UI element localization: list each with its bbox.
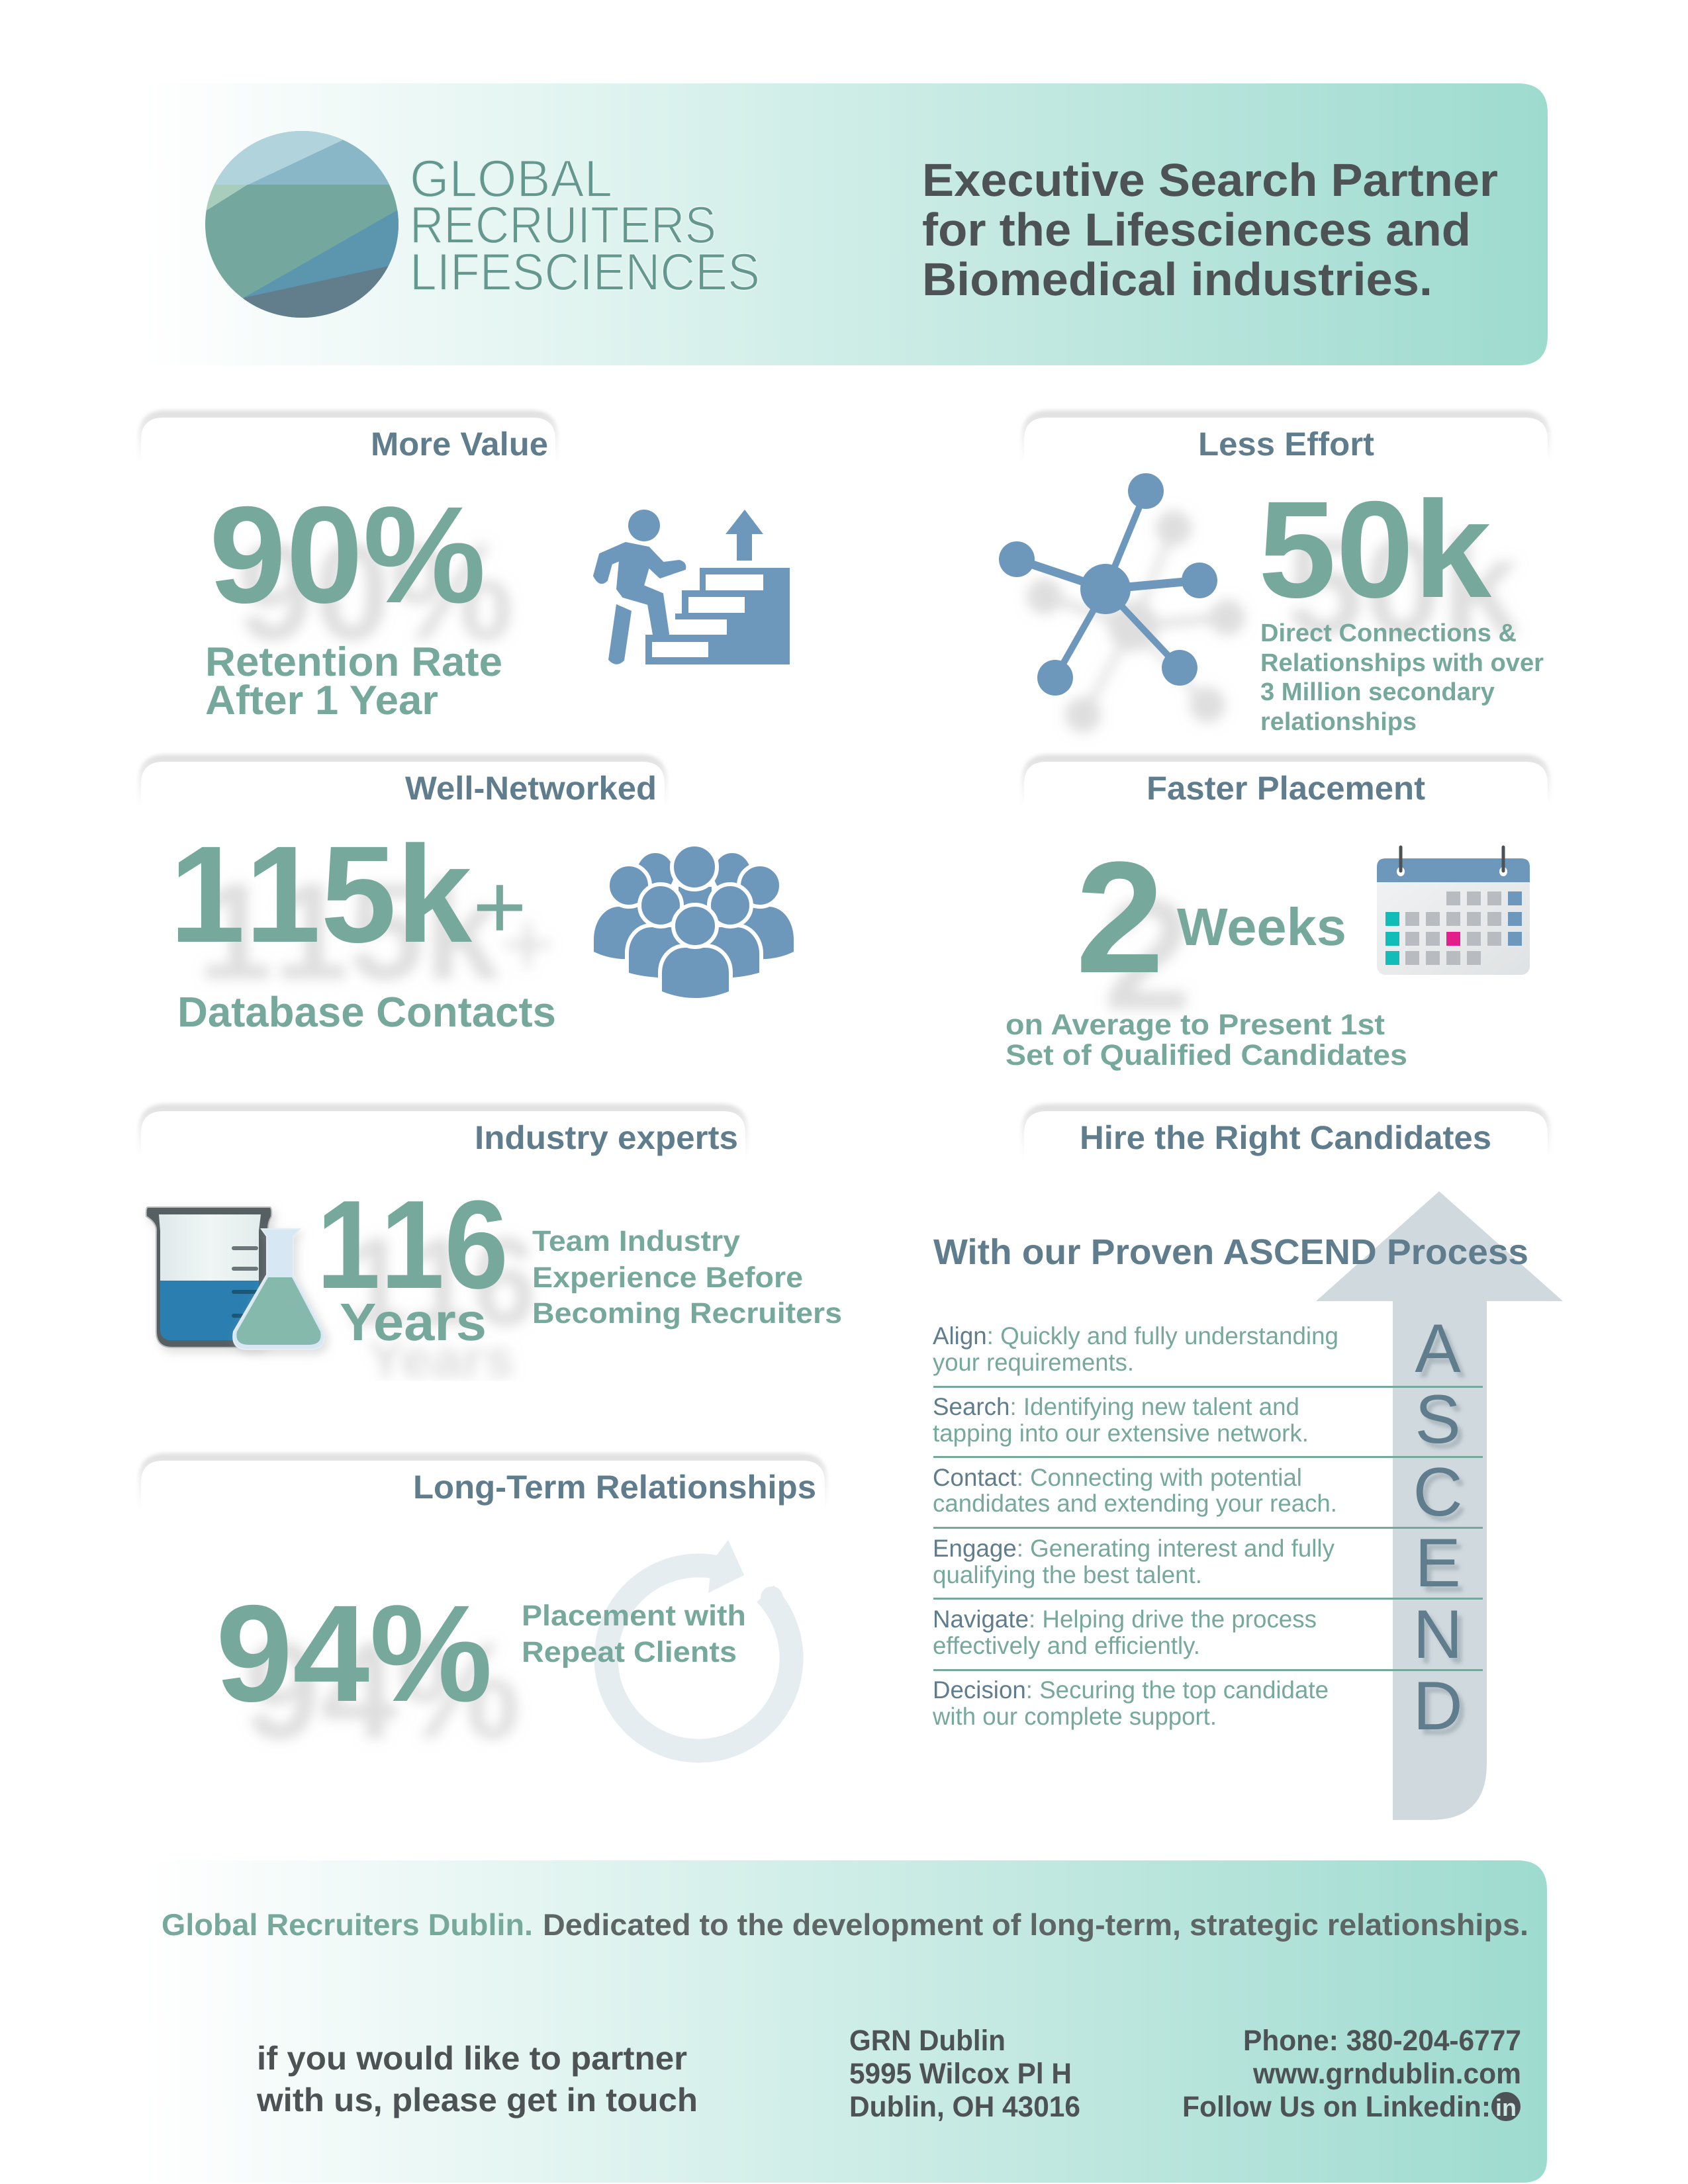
panel: faster placement — [1006, 754, 1550, 1071]
tab: industry experts — [138, 1104, 748, 1165]
stat label: present candidates — [1006, 1009, 1407, 1071]
header tagline — [922, 154, 1498, 305]
stat: 94%: 94% — [216, 1577, 492, 1731]
logo wordmark — [410, 149, 760, 301]
contact details: www.grndublin.com — [1252, 2058, 1521, 2090]
stat label: repeat clients: Repeat Clients — [522, 1636, 737, 1668]
header tagline: Executive Search Partner — [922, 154, 1498, 206]
step: navigate: effectively and efficiently. — [933, 1632, 1200, 1659]
icon: linkedin: in — [1495, 2094, 1517, 2121]
stat unit: years: Years — [340, 1293, 487, 1351]
call to action: if you would like to partner — [257, 2040, 687, 2077]
stat label: team experience: Team Industry — [532, 1225, 741, 1257]
contact details — [1182, 2025, 1521, 2123]
address — [849, 2025, 1080, 2123]
stat label: direct connections: Relationships with over — [1260, 649, 1544, 677]
stat label: repeat clients: Placement with — [522, 1600, 746, 1632]
tab: more value: More Value — [371, 426, 548, 463]
tab: hire the right candidates — [1021, 1104, 1550, 1165]
contact details: Follow Us on Linkedin: — [1182, 2091, 1491, 2123]
banner background — [142, 83, 1548, 365]
footer banner — [142, 1860, 1547, 2183]
address: Dublin, OH 43016 — [849, 2091, 1080, 2123]
step: contact — [933, 1464, 1337, 1517]
ascend letters: C — [1413, 1454, 1463, 1531]
beaker — [146, 1207, 271, 1347]
stat: 116: 116 — [316, 1175, 508, 1315]
tab: faster placement — [1021, 754, 1550, 814]
icon: group of people — [594, 844, 794, 1000]
panel: hire the right candidates — [932, 1104, 1563, 1820]
panel: less effort — [999, 410, 1550, 736]
panel: industry experts — [138, 1104, 842, 1351]
tab: less effort: Less Effort — [1198, 426, 1374, 463]
stat label: present candidates: on Average to Present 1st — [1006, 1009, 1385, 1041]
stat label: team experience: Experience Before — [532, 1261, 803, 1294]
stat label: direct connections: relationships — [1260, 708, 1417, 736]
tab: well-networked — [138, 754, 667, 814]
stat label: direct connections — [1260, 619, 1544, 736]
tab: faster placement: Faster Placement — [1147, 770, 1425, 807]
step: search: Search: Identifying new talent and — [933, 1393, 1299, 1420]
call to action — [256, 2040, 698, 2118]
call to action: with us, please get in touch — [256, 2081, 698, 2118]
step: contact: candidates and extending your reach. — [933, 1490, 1337, 1517]
step: align — [933, 1322, 1338, 1376]
step: decision: with our complete support. — [932, 1703, 1217, 1730]
step: search — [933, 1393, 1309, 1447]
stat label: direct connections: 3 Million secondary — [1260, 678, 1495, 706]
icon: circular arrow — [606, 1540, 792, 1751]
stat label: retention rate — [205, 639, 502, 723]
step dividers — [933, 1386, 1483, 1671]
logo wordmark: RECRUITERS — [410, 195, 716, 254]
header tagline: Biomedical industries. — [922, 253, 1432, 305]
step: align: your requirements. — [933, 1349, 1134, 1376]
ascend letters: N — [1413, 1596, 1463, 1673]
ascend letters: E — [1415, 1525, 1461, 1602]
stat label: database contacts: Database Contacts — [177, 988, 556, 1036]
stat unit: weeks: Weeks — [1177, 897, 1346, 956]
stat: 115k+: 115k — [169, 818, 472, 972]
tab: long-term relationships — [138, 1453, 827, 1516]
tab: less effort — [1021, 410, 1550, 470]
panel: long-term relationships — [138, 1453, 827, 1751]
address: GRN Dublin — [849, 2025, 1006, 2057]
stat: 90%: 90% — [209, 478, 486, 632]
panel: more value — [138, 410, 790, 723]
icon: network — [999, 473, 1217, 696]
step: engage — [933, 1535, 1335, 1588]
stat label: present candidates: Set of Qualified Candidates — [1006, 1039, 1407, 1071]
step: engage: qualifying the best talent. — [933, 1561, 1202, 1588]
step: engage: Engage: Generating interest and fully — [933, 1535, 1335, 1562]
address: 5995 Wilcox Pl H — [849, 2058, 1072, 2090]
tab: industry experts: Industry experts — [475, 1119, 738, 1156]
stat: 2: 2 — [1076, 829, 1164, 1006]
footer background — [142, 1860, 1547, 2183]
icon: person climbing stairs — [594, 510, 790, 664]
stat label: team experience — [532, 1225, 842, 1330]
stat label: repeat clients — [522, 1600, 746, 1668]
panel: well-networked — [138, 754, 794, 1036]
stat label: direct connections: Direct Connections & — [1260, 619, 1517, 647]
footer tagline: Dedicated to the development of long-term, strategic relationships. — [543, 1907, 1528, 1942]
step: contact: Contact: Connecting with potential — [933, 1464, 1302, 1491]
step: search: tapping into our extensive network. — [933, 1420, 1309, 1447]
step: decision — [932, 1676, 1329, 1730]
ascend letters: S — [1415, 1381, 1461, 1458]
stat label: retention rate: After 1 Year — [205, 678, 438, 723]
ascend letters — [1413, 1310, 1463, 1745]
heading: ascend process: With our Proven ASCEND Process — [933, 1232, 1528, 1272]
stat: 115k+: + — [473, 854, 527, 958]
step: navigate — [933, 1606, 1317, 1659]
tab: hire the right candidates: Hire the Right Candidates — [1080, 1119, 1491, 1156]
stat label: team experience: Becoming Recruiters — [532, 1297, 842, 1330]
contact details: Phone: 380-204-6777 — [1243, 2025, 1521, 2057]
tab: long-term relationships: Long-Term Relationships — [413, 1469, 816, 1506]
icon: linkedin — [1491, 2092, 1521, 2121]
logo circle — [205, 131, 399, 318]
icon: calendar — [1377, 847, 1530, 975]
ascend letters: D — [1413, 1668, 1463, 1745]
tab: more value — [138, 410, 558, 470]
tab: well-networked: Well-Networked — [405, 770, 657, 807]
step: navigate: Navigate: Helping drive the process — [933, 1606, 1317, 1633]
step: align: Align: Quickly and fully understanding — [933, 1322, 1338, 1349]
ascend letters: A — [1415, 1310, 1461, 1387]
step: decision: Decision: Securing the top candidate — [933, 1676, 1329, 1704]
header tagline: for the Lifesciences and — [922, 204, 1471, 255]
arrow: ascend — [1316, 1191, 1563, 1820]
footer tagline: Global Recruiters Dublin. — [162, 1907, 533, 1942]
logo wordmark: GLOBAL — [410, 149, 612, 208]
icon: beaker and flask — [146, 1207, 324, 1349]
flask — [233, 1229, 324, 1349]
stat label: retention rate: Retention Rate — [205, 639, 502, 685]
stat: 50k: 50k — [1258, 473, 1491, 627]
logo wordmark: LIFESCIENCES — [410, 242, 760, 301]
header banner — [142, 83, 1548, 365]
